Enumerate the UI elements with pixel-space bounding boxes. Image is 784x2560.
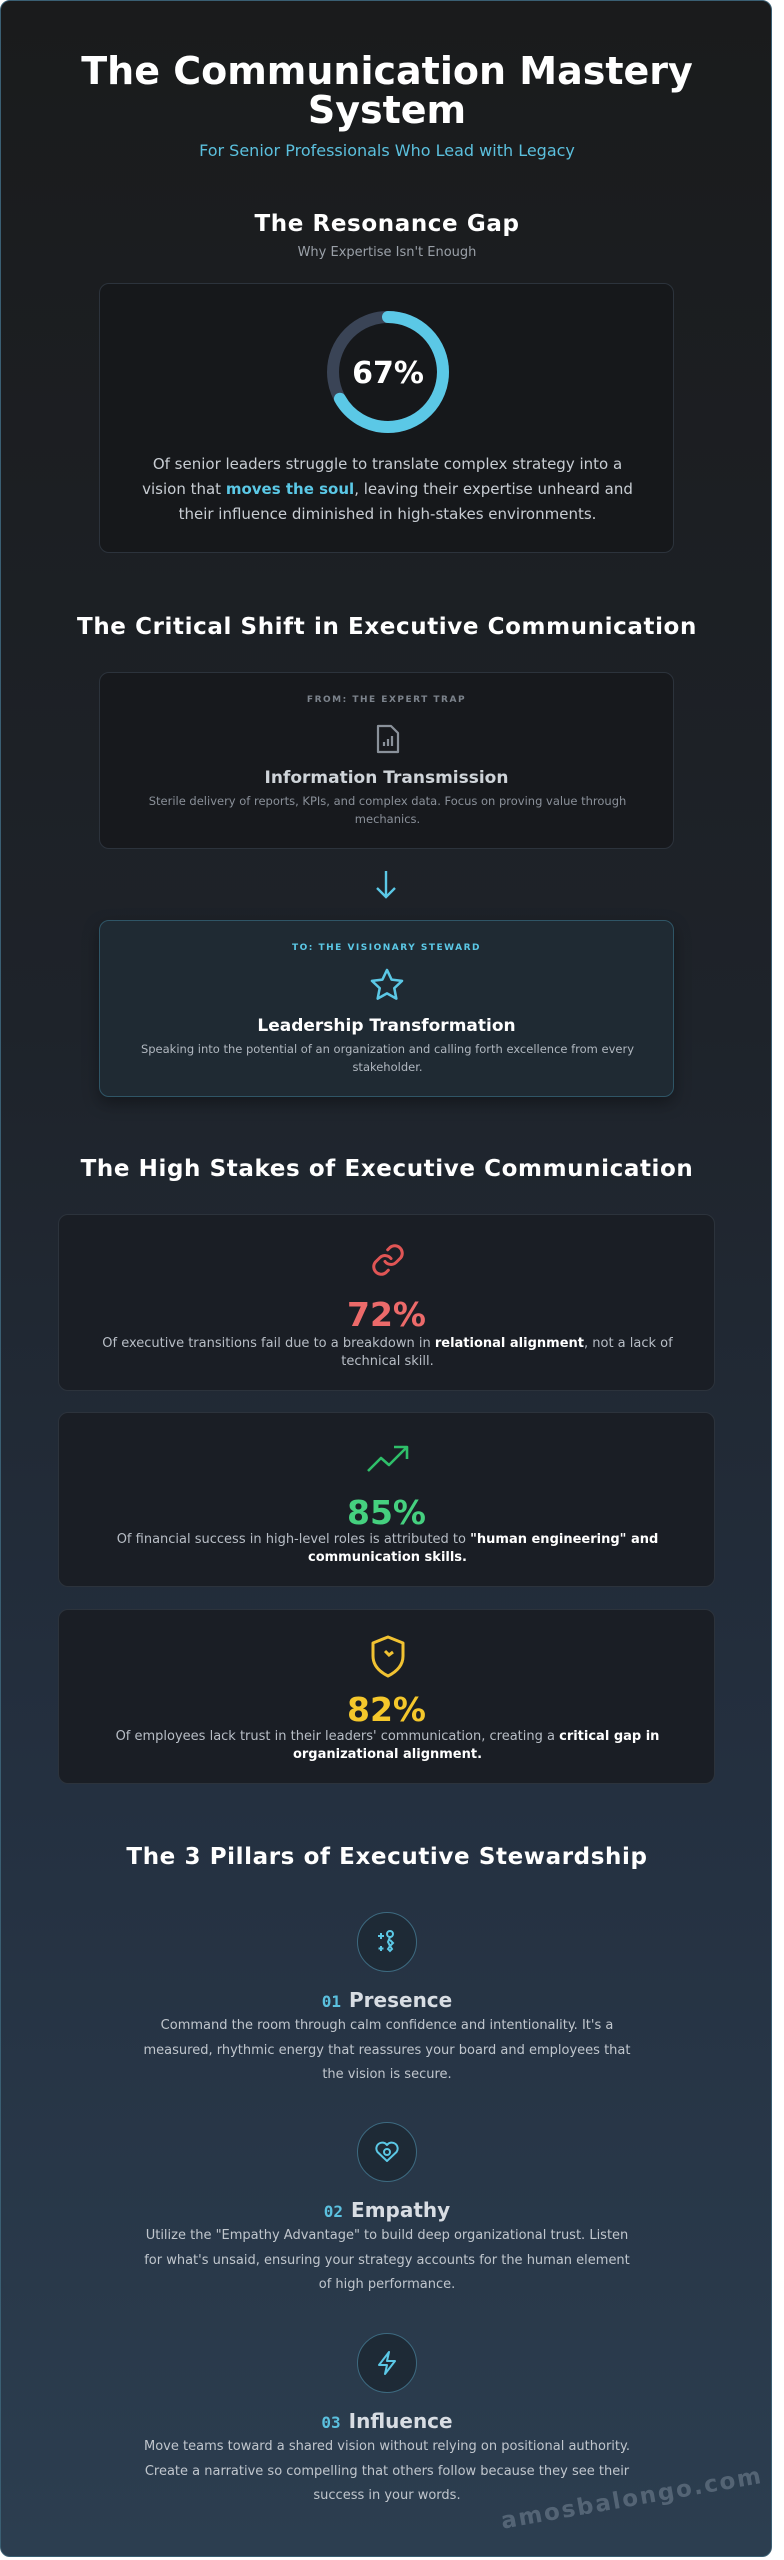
resonance text: vision that moves the soul, leaving their expertise unheard and [142,480,633,498]
icon: sparkles [357,1912,417,1972]
title: Leadership Transformation [257,1016,516,1036]
stat card 85% [58,1412,715,1587]
text: Of executive transitions fail due to a breakdown in relational alignment, not a lack of technical skill. [102,1336,673,1369]
donut chart 67%: 67% [352,356,424,391]
panel: to visionary steward [99,920,674,1097]
text: Of financial success in high-level roles is attributed to "human engineering" and communication skills. [117,1532,658,1565]
pillar: influence [144,2333,630,2503]
pillar: empathy: Utilize the "Empathy Advantage" to build deep organizational trust. Listen for what's unsaid, ensuring your strategy accounts for the human element of high performance. [144,2228,630,2292]
pillar: empathy: 02 Empathy [324,2198,450,2222]
stat card 82% [58,1609,715,1784]
icon: broken link [372,1244,404,1276]
text: Of employees lack trust in their leaders' communication, creating a critical gap in organizational alignment. [116,1729,659,1762]
description: Sterile delivery of reports, KPIs, and complex data. Focus on proving value through mechanics. [149,794,626,826]
heading: high stakes: The High Stakes of Executive Communication [81,1156,693,1182]
number: 85% [347,1493,426,1532]
panel: from expert trap [99,672,674,849]
heading: resonance gap: The Resonance Gap [254,211,520,237]
watermark: amosbalongo.com [499,2463,765,2535]
pillar: presence: 01 Presence [322,1988,452,2012]
heading: critical shift: The Critical Shift in Executive Communication [77,614,697,640]
heading: pillars: The 3 Pillars of Executive Stewardship [126,1844,648,1870]
panel: resonance gap card [99,283,674,553]
icon: trending up [367,1446,408,1472]
arrow down [376,871,396,899]
title [81,49,693,132]
icon: lightning [357,2333,417,2393]
title: System [308,88,466,132]
pillar: empathy [144,2122,630,2292]
stat card 72% [58,1214,715,1391]
icon: shield [372,1636,404,1678]
resonance text: their influence diminished in high-stakes environments. [179,505,596,523]
resonance text [142,455,633,523]
title: The Communication Mastery [81,49,693,93]
pillar: presence [144,1912,630,2082]
title: Information Transmission [265,768,508,788]
pillar: influence: 03 Influence [321,2409,453,2433]
donut chart 67% [327,311,449,433]
number: 72% [347,1295,426,1334]
icon: heart [357,2122,417,2182]
icon: star [370,968,404,1000]
icon: document chart [376,724,400,754]
subtitle: For Senior Professionals Who Lead with Legacy [199,141,575,160]
label to: TO: THE VISIONARY STEWARD [292,943,481,953]
number: 82% [347,1690,426,1729]
pillar: influence: Move teams toward a shared vision without relying on positional authority. Create a narrative so compelling that others follow because they see their success in your words. [144,2439,630,2503]
resonance text: Of senior leaders struggle to translate complex strategy into a [153,455,622,473]
label from: FROM: THE EXPERT TRAP [307,695,466,705]
subheading: Why Expertise Isn't Enough [298,245,476,260]
pillar: presence: Command the room through calm confidence and intentionality. It's a measured, rhythmic energy that reassures your board and employees that the vision is secure. [144,2018,630,2082]
description: Speaking into the potential of an organization and calling forth excellence from every stakeholder. [141,1042,634,1074]
